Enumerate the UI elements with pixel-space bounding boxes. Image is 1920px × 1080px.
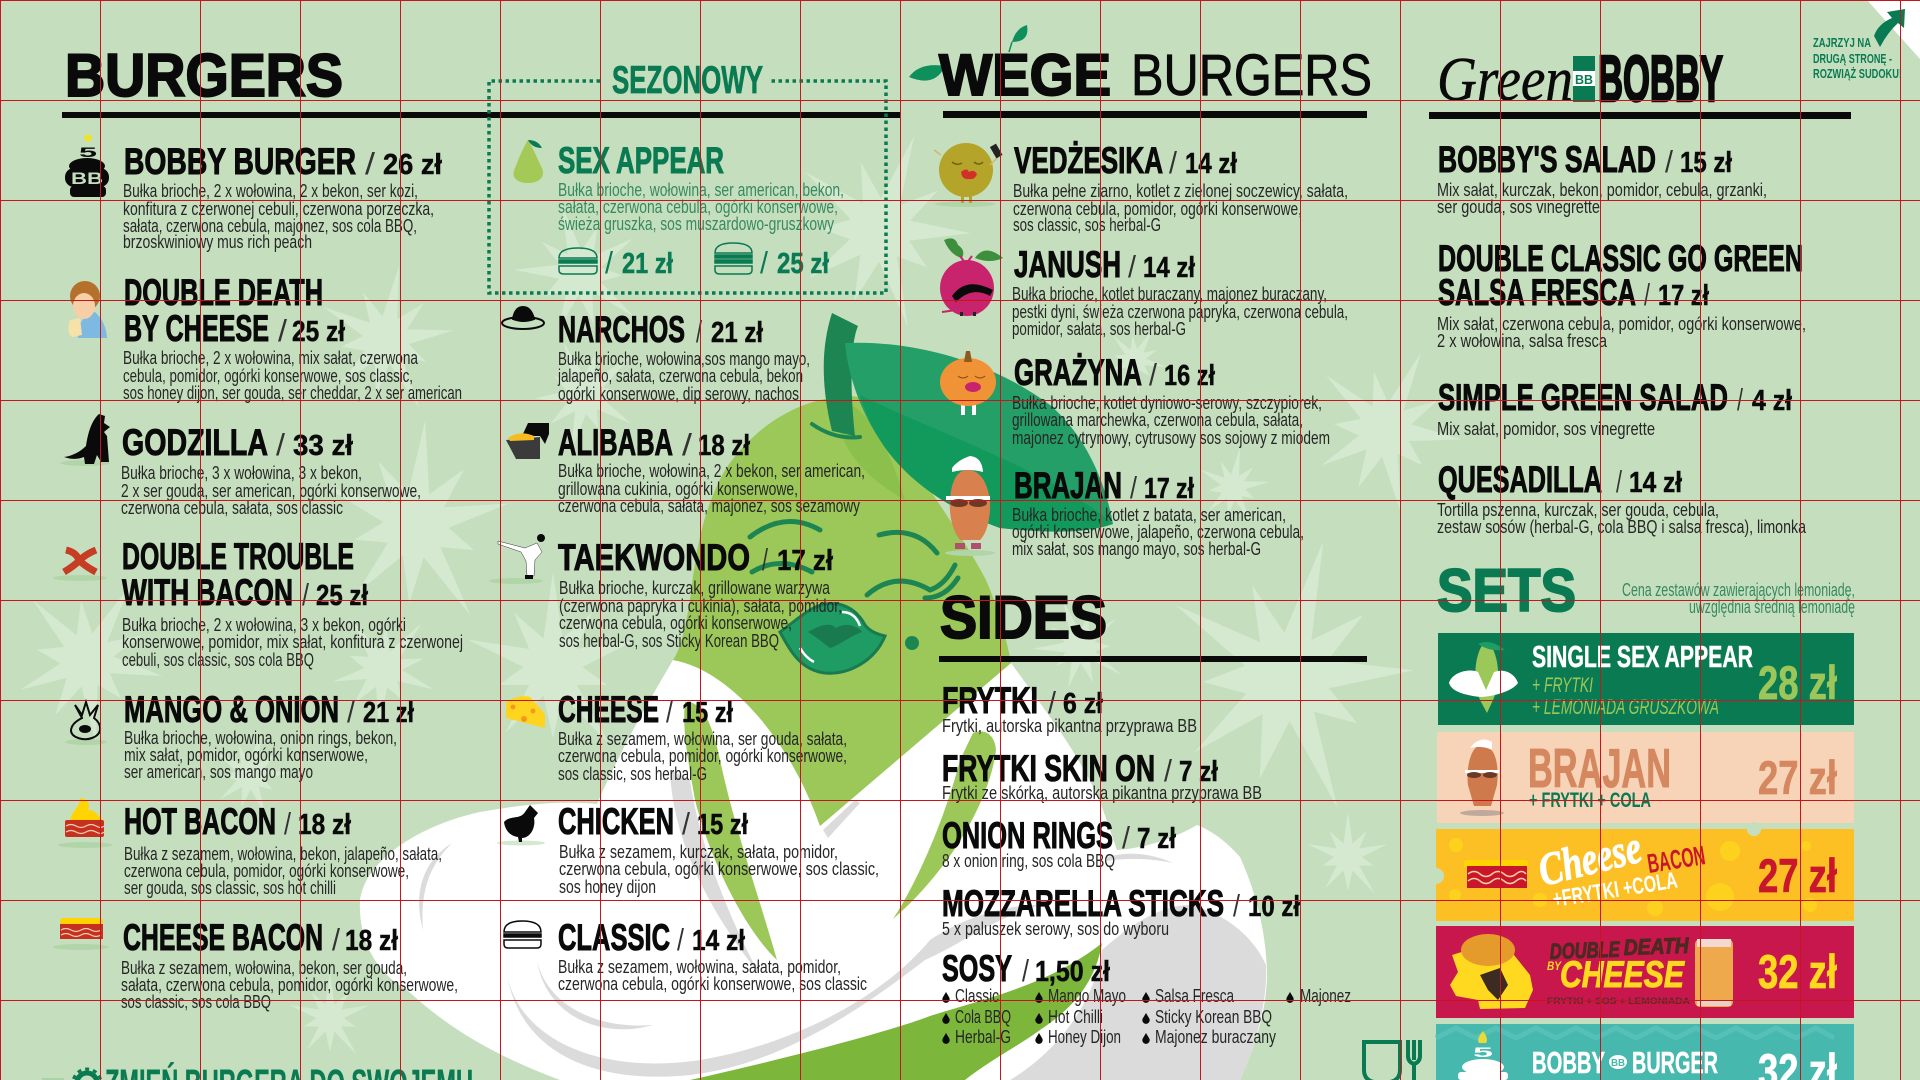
- side item: Frytki: Frytki, autorska pikantna przyprawa BB: [942, 716, 1197, 736]
- menu item: Alibaba: /: [682, 427, 692, 462]
- menu item: Alibaba: [506, 422, 865, 516]
- menu item: Quesadilla: QUESADILLA: [1438, 459, 1602, 500]
- menu item: Narchos: NARCHOS: [558, 309, 685, 350]
- menu item: Godzilla: 2 x ser gouda, ser american, ogórki konserwowe,: [121, 481, 421, 501]
- menu item: Double Death by Cheese: cebula, pomidor, ogórki konserwowe, sos classic,: [123, 366, 413, 386]
- menu item: Taekwondo: 17 zł: [777, 545, 833, 577]
- side item: Frytki: 6 zł: [1063, 688, 1103, 720]
- heading: Burgers: BURGERS: [65, 42, 343, 109]
- panel: seasonal burger: 25 zł: [777, 248, 829, 280]
- menu item: Simple Green Salad: 4 zł: [1752, 385, 1792, 417]
- menu item: Alibaba: ALIBABA: [558, 422, 673, 463]
- set: Single Sex Appear: + LEMONIADA GRUSZKOWA: [1532, 696, 1719, 719]
- panel: seasonal burger: sałata, czerwona cebula, ogórki konserwowe,: [558, 197, 838, 217]
- menu item: Hot Bacon: ser gouda, sos classic, sos hot chilli: [124, 878, 336, 898]
- menu item: Cheese Bacon: sos classic, sos cola BBQ: [121, 992, 271, 1012]
- menu item: Cheese: /: [666, 694, 673, 729]
- face: [750, 521, 958, 598]
- menu item: Vedżesika: VEDŻESIKA: [1014, 140, 1163, 181]
- icon: burning bacon: [58, 798, 112, 848]
- heading: Wege Burgers: WEGE: [939, 43, 1111, 108]
- menu item: Hot Bacon: Bułka z sezamem, wołowina, bekon, jalapeño, sałata,: [124, 844, 442, 864]
- side item: Onion rings: /: [1122, 820, 1130, 855]
- robe and sleeves: [360, 660, 1267, 1080]
- menu item: Hot Bacon: /: [284, 806, 291, 841]
- menu item: Grażyna: 16 zł: [1164, 360, 1215, 392]
- menu item: Vedżesika: /: [1169, 145, 1177, 180]
- menu item: Hot Bacon: HOT BACON: [124, 801, 276, 842]
- menu item: Cheese Bacon: CHEESE BACON: [123, 917, 323, 958]
- set: Double Death by Cheese: DEATH: [1623, 933, 1690, 960]
- menu item: Simple Green Salad: [1437, 377, 1792, 439]
- menu item: Double Classic Go Green: /: [1644, 277, 1650, 312]
- menu item: Vedżesika: czerwona cebula, pomidor, ogórki konserwowe,: [1013, 199, 1302, 219]
- menu item: Cheese Bacon: /: [332, 922, 340, 957]
- menu item: Janush: JANUSH: [1014, 244, 1121, 285]
- menu item: Godzilla: czerwona cebula, sałata, sos classic: [121, 498, 343, 518]
- icon: single burger: [559, 248, 597, 274]
- menu item: Double Trouble with Bacon: Bułka brioche, 2 x wołowina, 3 x bekon, ogórki: [122, 615, 406, 635]
- side item: Sauces: SOSY: [942, 948, 1012, 989]
- side item: Mozzarella sticks: [942, 883, 1300, 939]
- menu item: Double Classic Go Green: [1437, 238, 1806, 351]
- logo: Green Bobby: BOBBY: [1598, 42, 1723, 115]
- menu item: Grażyna: /: [1149, 357, 1157, 392]
- side item: Frytki skin on: 7 zł: [1179, 756, 1218, 788]
- menu item: Alibaba: Bułka brioche, wołowina, 2 x bekon, ser american,: [558, 461, 865, 481]
- menu item: Taekwondo: czerwona cebula, ogórki konserwowe,: [559, 613, 792, 633]
- menu item: Chicken: Bułka z sezamem, kurczak, sałata, pomidor,: [559, 842, 838, 862]
- icon: sweet potato: [1460, 740, 1504, 816]
- menu item: Grażyna: grillowana marchewka, czerwona cebula, sałata,: [1012, 410, 1303, 430]
- menu item: Godzilla: Bułka brioche, 3 x wołowina, 3 x bekon,: [121, 463, 362, 483]
- menu item: Bobby's Salad: BOBBY'S SALAD: [1438, 139, 1656, 180]
- icon: Bobby cake: [1458, 1031, 1508, 1080]
- menu item: Cheese: [506, 689, 847, 784]
- set: Double Death by Cheese: CHEESE: [1560, 954, 1685, 995]
- robe green folds: [684, 702, 1102, 1080]
- set: Bobby Burger: BURGER: [1632, 1045, 1718, 1080]
- menu item: Mango & Onion: Bułka brioche, wołowina, onion rings, bekon,: [124, 728, 397, 748]
- menu item: Taekwondo: (czerwona papryka i cukinia), sałata, pomidor,: [559, 596, 842, 616]
- icon: pear lady: [1449, 642, 1518, 713]
- side item: Frytki: FRYTKI: [942, 680, 1038, 721]
- logo: Green Bobby: [1429, 42, 1851, 119]
- side item: Frytki: [942, 680, 1197, 736]
- menu item: Brajan: /: [1130, 470, 1137, 505]
- side item: Frytki skin on: /: [1164, 753, 1172, 788]
- menu item: Vedżesika: sos classic, sos herbal-G: [1013, 215, 1161, 235]
- menu item: Brajan: mix sałat, sos mango mayo, sos herbal-G: [1012, 539, 1261, 559]
- menu item: Cheese: CHEESE: [558, 689, 659, 730]
- menu item: Janush: pestki dyni, świeża czerwona papryka, czerwona cebula,: [1012, 302, 1348, 322]
- icon: leaves: [909, 25, 1027, 81]
- menu item: Classic: 14 zł: [692, 925, 745, 957]
- panel: seasonal burger: SEX APPEAR: [558, 140, 724, 181]
- menu item: Alibaba: czerwona cebula, sałata, majonez, sos sezamowy: [558, 496, 860, 516]
- illustration: pear lady mascot: [360, 313, 1267, 1080]
- set: Brajan: + FRYTKI + COLA: [1529, 789, 1651, 812]
- icon: burger: [504, 921, 541, 948]
- logo: Green Bobby: BB: [1575, 72, 1593, 87]
- side item: Sauces: /: [1022, 953, 1029, 988]
- icon: sweet potato character: [945, 456, 995, 556]
- side item: Sauces: Sticky Korean BBQ: [1155, 1007, 1272, 1027]
- menu item: Cheese: czerwona cebula, pomidor, ogórki konserwowe,: [558, 746, 847, 766]
- side item: Mozzarella sticks: /: [1233, 888, 1240, 923]
- side item: Sauces: Classic: [955, 986, 999, 1006]
- set: Brajan: BRAJAN: [1528, 737, 1671, 799]
- menu item: Double Death by Cheese: 25 zł: [292, 316, 345, 348]
- menu item: Double Trouble with Bacon: WITH BACON: [122, 572, 293, 613]
- side item: Sauces: [942, 948, 1351, 1047]
- menu item: Bobby's Salad: /: [1665, 144, 1673, 179]
- panel: seasonal burger: świeża gruszka, sos muszardowo-gruszkowy: [558, 214, 834, 234]
- menu item: Bobby's Salad: ser gouda, sos vinegrette: [1437, 197, 1600, 217]
- side item: Sauces: Mango Mayo: [1048, 986, 1126, 1006]
- menu item: Taekwondo: sos herbal-G, sos Sticky Korean BBQ: [559, 631, 779, 651]
- menu item: Quesadilla: 14 zł: [1629, 467, 1682, 499]
- menu item: Double Trouble with Bacon: [53, 536, 463, 670]
- menu item: Godzilla: 33 zł: [293, 430, 353, 462]
- icon: lentil patty character: [934, 143, 1002, 207]
- menu item: Mango & Onion: ser american, sos mango mayo: [124, 762, 313, 782]
- icon: Bobby cake: 5: [79, 144, 97, 160]
- menu item: Cheese Bacon: 18 zł: [345, 925, 398, 957]
- menu item: Bobby's Salad: [1437, 139, 1767, 217]
- set: Single Sex Appear: SINGLE SEX APPEAR: [1532, 639, 1753, 674]
- menu item: Classic: /: [677, 922, 684, 957]
- menu item: Classic: [504, 917, 867, 994]
- menu item: Cheese Bacon: Bułka z sezamem, wołowina, bekon, ser gouda,: [121, 958, 407, 978]
- menu item: Janush: pomidor, sałata, sos herbal-G: [1012, 319, 1186, 339]
- menu item: Chicken: sos honey dijon: [559, 877, 656, 897]
- menu item: Bobby Burger: BOBBY BURGER: [124, 141, 356, 182]
- menu item: Taekwondo: /: [762, 542, 768, 577]
- icon: pumpkin character: [940, 351, 996, 415]
- menu item: Chicken: czerwona cebula, ogórki konserwowe, sos classic,: [559, 859, 879, 879]
- menu item: Bobby's Salad: 15 zł: [1680, 147, 1732, 179]
- icon: crossed bacon: [53, 550, 107, 581]
- set: Cheese Bacon: +FRYTKI +COLA: [1551, 867, 1679, 912]
- side item: Sauces: Majonez buraczany: [1155, 1027, 1276, 1047]
- side item: Frytki skin on: Frytki ze skórką, autorska pikantna przyprawa BB: [942, 783, 1262, 803]
- menu item: Cheese: sos classic, sos herbal-G: [558, 764, 707, 784]
- menu item: Brajan: BRAJAN: [1014, 465, 1122, 506]
- side item: Sauces: Salsa Fresca: [1155, 986, 1235, 1006]
- icon: cheese bacon: [53, 918, 109, 950]
- icon: cheese wedge: [506, 696, 545, 728]
- corner note: turn the page: [1813, 0, 1920, 81]
- menu item: Janush: [940, 238, 1348, 339]
- menu item: Cheese Bacon: [53, 917, 458, 1012]
- heading: Sides: SIDES: [940, 584, 1107, 651]
- icon: gear: [73, 1069, 101, 1080]
- set: Cheese Bacon: BACON: [1645, 840, 1707, 879]
- menu item: Mango & Onion: MANGO & ONION: [124, 689, 339, 730]
- icon: taekwondo kick: [489, 534, 545, 584]
- heading: Sides: [939, 584, 1367, 662]
- panel: seasonal burger: [489, 59, 886, 293]
- side item: Frytki skin on: FRYTKI SKIN ON: [942, 748, 1155, 789]
- icon: plate and fork: [1364, 1040, 1420, 1080]
- side item: Onion rings: 7 zł: [1137, 823, 1176, 855]
- menu item: Grażyna: [940, 351, 1330, 448]
- menu item: Double Trouble with Bacon: DOUBLE TROUBLE: [122, 536, 354, 577]
- icon: Bobby cake: 5: [1473, 1044, 1494, 1060]
- menu item: Double Death by Cheese: Bułka brioche, 2 x wołowina, mix sałat, czerwona: [123, 348, 419, 368]
- menu item: Vedżesika: 14 zł: [1185, 148, 1237, 180]
- set: Single Sex Appear: 28 zł: [1758, 656, 1837, 709]
- icon: pear: [513, 140, 543, 183]
- panel: seasonal burger: /: [760, 245, 768, 280]
- set: Bobby Burger: BOBBY: [1532, 1045, 1605, 1080]
- menu item: Classic: czerwona cebula, ogórki konserwowe, sos classic: [558, 974, 867, 994]
- menu item: Quesadilla: zestaw sosów (herbal-G, cola BBQ i salsa fresca), limonka: [1437, 517, 1807, 537]
- menu item: Simple Green Salad: Mix sałat, pomidor, sos vinegrette: [1437, 419, 1655, 439]
- icon: Godzilla: [60, 414, 110, 466]
- panel: seasonal burger: SEZONOWY: [612, 59, 763, 102]
- menu item: Simple Green Salad: /: [1737, 382, 1743, 417]
- panel: seasonal burger: /: [605, 245, 613, 280]
- menu item: Narchos: ogórki konserwowe, dip serowy, nachos: [558, 384, 799, 404]
- menu item: Double Trouble with Bacon: konserwowe, pomidor, mix sałat, konfitura z czerwonej: [122, 632, 463, 652]
- side item: Sauces: 1,50 zł: [1035, 956, 1110, 988]
- heading: Sets: SETS: [1437, 557, 1576, 624]
- menu item: Alibaba: grillowana cukinia, ogórki konserwowe,: [558, 479, 798, 499]
- set: Double Death by Cheese: 32 zł: [1758, 945, 1837, 998]
- menu item: Godzilla: /: [276, 427, 285, 462]
- menu item: Double Classic Go Green: 17 zł: [1658, 280, 1709, 312]
- menu item: Double Death by Cheese: sos honey dijon, ser gouda, ser cheddar, 2 x ser american: [123, 383, 462, 403]
- icon: chicken: [497, 805, 545, 846]
- menu item: Brajan: 17 zł: [1144, 473, 1194, 505]
- heading: Wege Burgers: [909, 25, 1372, 118]
- menu item: Narchos: /: [696, 314, 702, 349]
- menu item: Double Death by Cheese: BY CHEESE: [124, 308, 269, 349]
- menu item: Hot Bacon: [58, 798, 442, 898]
- side item: Onion rings: ONION RINGS: [942, 815, 1113, 856]
- menu item: Vedżesika: Bułka pełne ziarno, kotlet z zielonej soczewicy, sałata,: [1013, 181, 1348, 201]
- menu item: Double Trouble with Bacon: cebuli, sos classic, sos cola BBQ: [122, 650, 314, 670]
- menu item: Double Trouble with Bacon: 25 zł: [316, 580, 368, 612]
- menu item: Janush: /: [1128, 249, 1136, 284]
- heading: Sets: [1437, 557, 1855, 624]
- menu item: Double Death by Cheese: [68, 272, 462, 403]
- icon: treasure chest: [506, 423, 549, 459]
- menu item: Brajan: [945, 456, 1304, 559]
- menu item: Bobby Burger: sałata, czerwona cebula, majonez, sos cola BBQ,: [123, 216, 417, 236]
- menu item: Taekwondo: Bułka brioche, kurczak, grillowane warzywa: [559, 578, 831, 598]
- set: Bobby Burger: [1436, 1024, 1854, 1080]
- menu item: Double Classic Go Green: Mix sałat, czerwona cebula, pomidor, ogórki konserwowe,: [1437, 314, 1806, 334]
- side item: Onion rings: 8 x onion ring, sos cola BBQ: [942, 851, 1115, 871]
- menu item: Narchos: [502, 307, 810, 404]
- menu item: Janush: 14 zł: [1143, 252, 1195, 284]
- icon: double burger: [715, 243, 752, 274]
- set: Double Death by Cheese: [1436, 926, 1854, 1018]
- menu item: Chicken: CHICKEN: [558, 801, 674, 842]
- icon: shocked lady: [68, 281, 107, 338]
- menu item: Bobby Burger: /: [365, 146, 375, 181]
- side item: Mozzarella sticks: MOZZARELLA STICKS: [942, 883, 1224, 924]
- menu item: Grażyna: Bułka brioche, kotlet dyniowo-serowy, szczypiorek,: [1012, 393, 1322, 413]
- arrow: [1874, 9, 1905, 47]
- set: Double Death by Cheese: BY: [1547, 959, 1562, 973]
- menu item: Chicken: /: [682, 806, 690, 841]
- menu item: Brajan: Bułka brioche, kotlet z batata, ser american,: [1012, 505, 1286, 525]
- side item: Sauces: Hot Chilli: [1048, 1007, 1103, 1027]
- menu item: Classic: CLASSIC: [558, 917, 670, 958]
- menu item: Hot Bacon: czerwona cebula, pomidor, ogórki konserwowe,: [124, 861, 409, 881]
- set: Cheese Bacon: Cheese: [1533, 821, 1646, 896]
- menu item: Double Classic Go Green: SALSA FRESCA: [1438, 272, 1636, 313]
- menu item: Double Trouble with Bacon: /: [302, 577, 309, 612]
- leaf hat: [824, 313, 858, 436]
- menu item: Chicken: [497, 801, 879, 897]
- menu item: Janush: Bułka brioche, kotlet buraczany, majonez buraczany,: [1012, 284, 1327, 304]
- menu item: Cheese: Bułka z sezamem, wołowina, ser gouda, sałata,: [558, 729, 847, 749]
- menu item: Alibaba: 18 zł: [698, 430, 750, 462]
- panel: seasonal burger: 21 zł: [622, 248, 673, 280]
- menu item: Double Classic Go Green: 2 x wołowina, salsa fresca: [1437, 331, 1608, 351]
- set: Brajan: [1437, 732, 1854, 823]
- icon: cheese bacon: [1464, 860, 1528, 888]
- menu item: Quesadilla: Tortilla pszenna, kurczak, ser gouda, cebula,: [1437, 500, 1719, 520]
- menu item: Double Death by Cheese: DOUBLE DEATH: [124, 272, 323, 313]
- icon: can: [1695, 939, 1733, 1007]
- menu item: Simple Green Salad: SIMPLE GREEN SALAD: [1438, 377, 1728, 418]
- icon: Bobby cake: BB: [71, 169, 103, 188]
- menu item: Cheese Bacon: sałata, czerwona cebula, pomidor, ogórki konserwowe,: [121, 975, 458, 995]
- menu item: Grażyna: majonez cytrynowy, cytrusowy sos sojowy z miodem: [1012, 428, 1330, 448]
- side item: Mozzarella sticks: 10 zł: [1248, 891, 1300, 923]
- icon: BB badge: [1609, 1055, 1627, 1069]
- menu item: Narchos: Bułka brioche, wołowina,sos mango mayo,: [558, 349, 810, 369]
- icon: beet character: [940, 238, 1003, 316]
- menu item: Bobby Burger: Bułka brioche, 2 x wołowina, 2 x bekon, ser kozi,: [123, 181, 418, 201]
- menu item: Narchos: jalapeño, sałata, czerwona cebula, bekon: [557, 366, 803, 386]
- menu item: Bobby Burger: [65, 134, 442, 252]
- icon: melting cheese burger: [1450, 934, 1533, 1009]
- menu item: Bobby Burger: konfitura z czerwonej cebuli, czerwona porzeczka,: [123, 199, 434, 219]
- logo: Green Bobby: Green: [1437, 46, 1573, 114]
- set: Double Death by Cheese: FRYTKI + SOS + LEMONIADA: [1547, 996, 1691, 1006]
- menu item: Vedżesika: [934, 140, 1348, 235]
- menu item: Narchos: 21 zł: [711, 317, 763, 349]
- menu item: Chicken: 15 zł: [697, 809, 748, 841]
- menu item: Mango & Onion: /: [347, 694, 355, 729]
- menu item: Godzilla: [60, 414, 421, 518]
- callout: change the burger: [42, 1061, 473, 1080]
- set: Brajan: 27 zł: [1758, 751, 1837, 804]
- heading: Wege Burgers: BURGERS: [1131, 43, 1372, 108]
- icon: BB badge: BB: [1611, 1058, 1625, 1069]
- menu item: Mango & Onion: 21 zł: [363, 697, 414, 729]
- menu item: Hot Bacon: 18 zł: [298, 809, 351, 841]
- menu item: Cheese: 15 zł: [682, 697, 733, 729]
- menu item: Taekwondo: TAEKWONDO: [558, 537, 750, 578]
- panel: seasonal burger: Bułka brioche, wołowina, ser american, bekon,: [558, 180, 844, 200]
- menu item: Mango & Onion: [65, 689, 414, 782]
- side item: Sauces: Majonez: [1300, 986, 1351, 1006]
- menu item: Taekwondo: [489, 534, 842, 651]
- menu item: Quesadilla: [1437, 459, 1807, 537]
- set: Double Death by Cheese: DOUBLE: [1549, 937, 1621, 964]
- menu item: Bobby's Salad: Mix sałat, kurczak, bekon, pomidor, cebula, grzanki,: [1437, 180, 1767, 200]
- set: Cheese Bacon: 27 zł: [1758, 849, 1837, 902]
- menu item: Grażyna: GRAŻYNA: [1014, 352, 1142, 393]
- menu item: Bobby Burger: 26 zł: [383, 149, 442, 181]
- menu item: Mango & Onion: mix sałat, pomidor, ogórki konserwowe,: [124, 745, 368, 765]
- menu item: Brajan: ogórki konserwowe, jalapeño, czerwona cebula,: [1012, 522, 1304, 542]
- pear body: [673, 396, 1011, 826]
- side item: Onion rings: [942, 815, 1176, 871]
- side item: Sauces: Cola BBQ: [955, 1007, 1011, 1027]
- menu item: Double Death by Cheese: /: [278, 313, 287, 348]
- menu item: Godzilla: GODZILLA: [122, 422, 268, 463]
- side item: Frytki: /: [1048, 685, 1056, 720]
- corner note: turn the page: ZAJRZYJ NA: [1813, 35, 1871, 50]
- set: Single Sex Appear: [1438, 633, 1854, 725]
- icon: Bobby cake: [65, 134, 109, 197]
- set: Cheese Bacon: [1428, 821, 1854, 921]
- side item: Sauces: Herbal-G: [955, 1027, 1011, 1047]
- icon: onion: [65, 702, 107, 745]
- side item: Sauces: Honey Dijon: [1048, 1027, 1121, 1047]
- set: Single Sex Appear: + FRYTKI: [1532, 674, 1593, 697]
- menu item: Classic: Bułka z sezamem, wołowina, sałata, pomidor,: [558, 957, 841, 977]
- menu item: Bobby Burger: brzoskwiniowy mus rich peach: [123, 232, 312, 252]
- side item: Mozzarella sticks: 5 x paluszek serowy, sos do wyboru: [942, 919, 1169, 939]
- menu item: Quesadilla: /: [1616, 464, 1622, 499]
- icon: sombrero: [502, 307, 544, 329]
- side item: Frytki skin on: [942, 748, 1262, 803]
